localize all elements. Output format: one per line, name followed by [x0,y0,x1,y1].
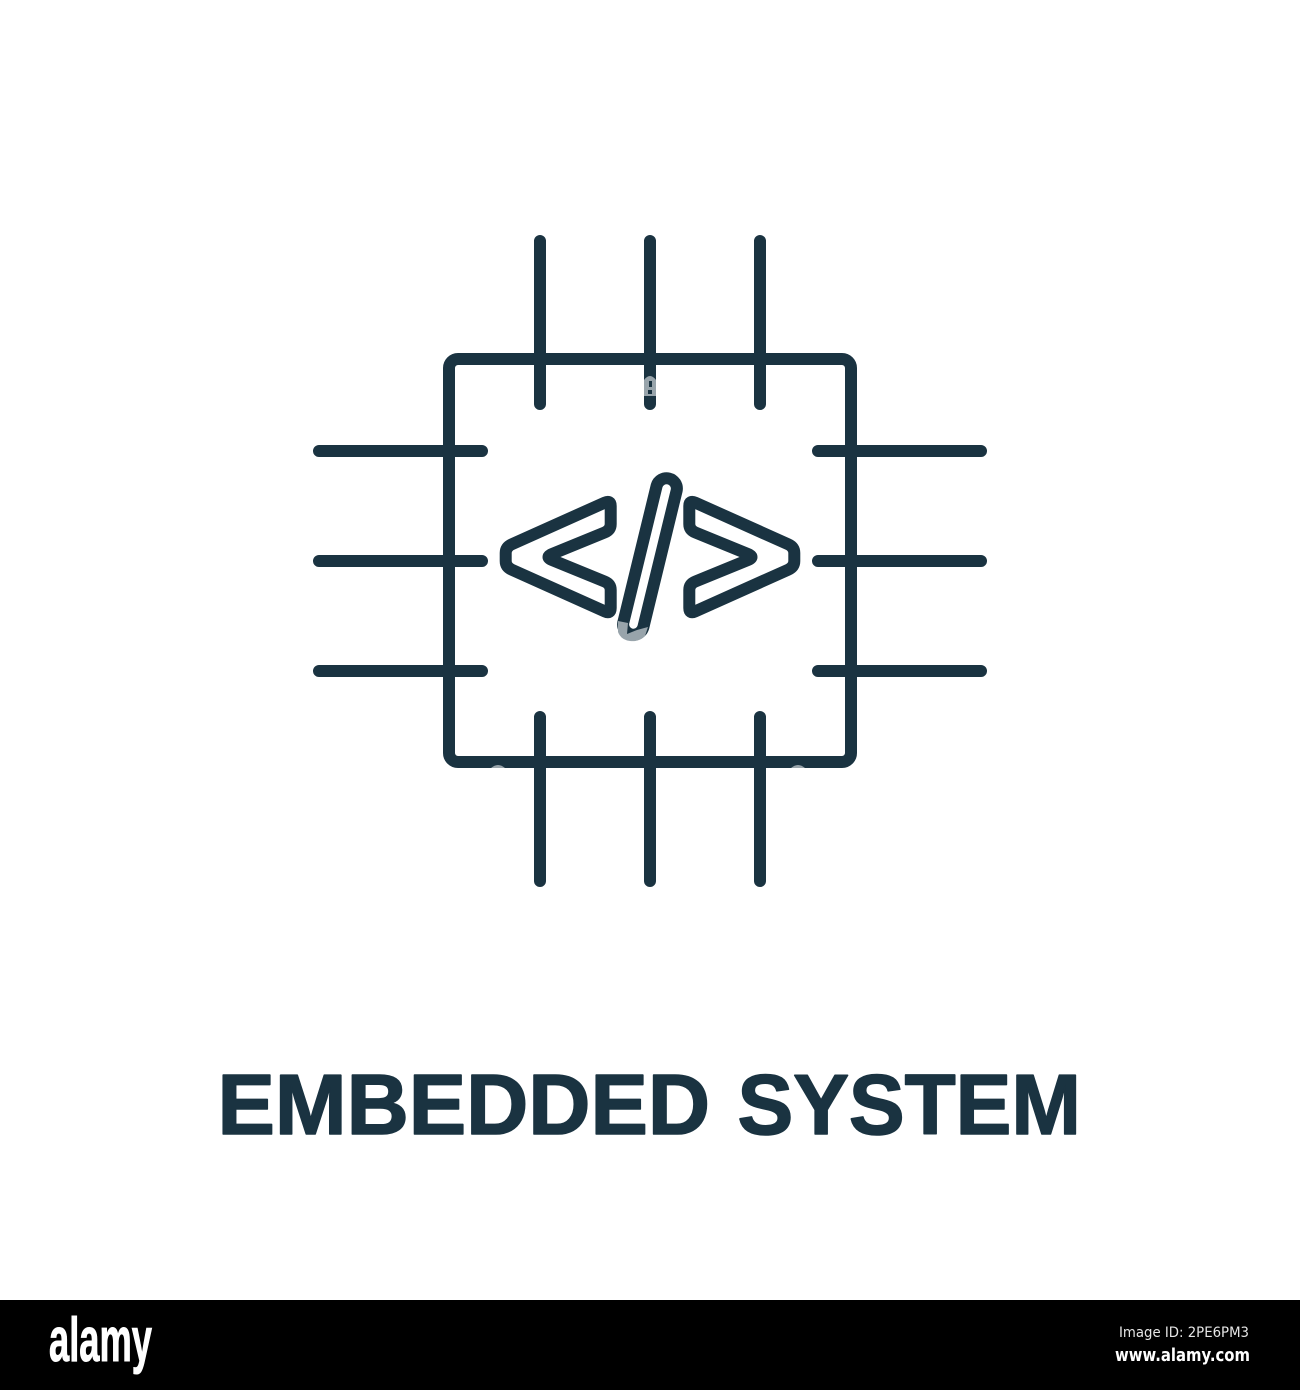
chip body [449,359,851,762]
left pins [319,451,482,671]
code symbol: slash [623,478,677,635]
scan artifacts on icon [491,376,805,768]
bottom pins [540,717,760,881]
title: SYSTEM [738,1058,1081,1153]
code symbol: right angle bracket [689,502,794,612]
title: EMBEDDED [218,1058,710,1153]
website: www.alamy.com [1115,1345,1250,1366]
footer bar [0,1300,1300,1390]
code symbol: left angle bracket [506,502,611,612]
image id: Image ID: 2PE6PM3 [1119,1325,1249,1341]
icon: embedded system chip [319,241,981,881]
title [218,1058,1081,1153]
right pins [818,451,981,671]
top pins [540,241,760,404]
footer logo: alamy [49,1306,152,1375]
